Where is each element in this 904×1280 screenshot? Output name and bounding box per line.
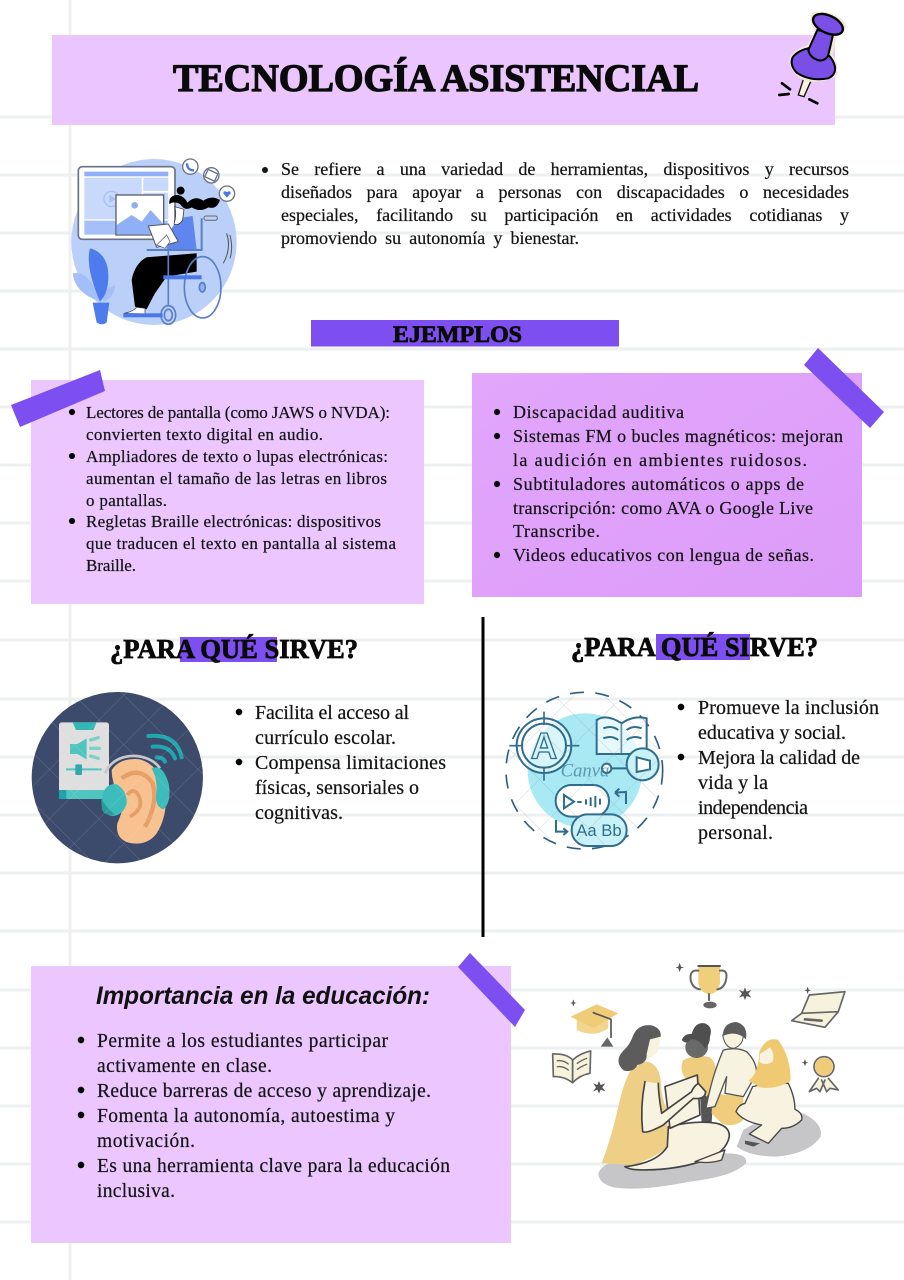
trophy <box>690 966 726 1008</box>
intro text with bullet: promoviendo su autonomía y bienestar. <box>281 228 579 248</box>
target letter A <box>509 712 579 781</box>
list: right uses: vida y la <box>698 772 768 794</box>
open book <box>553 1051 591 1083</box>
watermark: Canva <box>561 761 609 782</box>
open book <box>597 717 647 754</box>
tape <box>458 953 525 1027</box>
list: hearing tools: Sistemas FM o bucles magnéticos: mejoran <box>513 426 843 446</box>
list: benefits: Es una herramienta clave para la educación <box>97 1156 450 1177</box>
student in yellow <box>681 1023 716 1123</box>
list: right uses: Mejora la calidad de <box>698 747 860 769</box>
vertical divider <box>482 617 484 937</box>
speaker node <box>602 748 659 780</box>
panel: right examples <box>472 348 884 597</box>
title: TECNOLOGÍA ASISTENCIAL <box>173 56 699 100</box>
list: benefits: inclusiva. <box>97 1181 175 1202</box>
heading: para que sirve left: ¿PARA QUÉ SIRVE? <box>110 634 358 664</box>
list: right uses <box>678 697 879 844</box>
intro text with bullet: diseñados para apoyar a personas con discapacidades o necesidades <box>281 182 849 202</box>
plant in pot <box>73 248 115 324</box>
list: hearing tools: transcripción: como AVA o Google Live <box>513 498 813 518</box>
list: left uses <box>236 702 446 824</box>
heading: ejemplos <box>311 320 619 347</box>
list: screen tools: Regletas Braille electrónicas: dispositivos <box>86 512 381 531</box>
woman <box>124 187 220 314</box>
list: screen tools: convierten texto digital en audio. <box>86 425 323 444</box>
list: screen tools: o pantallas. <box>86 491 167 510</box>
heading: ejemplos: EJEMPLOS <box>393 322 522 347</box>
list: benefits: Fomenta la autonomía, autoestima y <box>97 1106 395 1127</box>
title banner <box>52 35 835 125</box>
list: left uses: Compensa limitaciones <box>255 752 446 774</box>
student with hijab <box>736 1039 802 1147</box>
wheelchair <box>123 216 232 324</box>
ground shadow <box>598 1113 821 1189</box>
list: screen tools: que traducen el texto en pantalla al sistema <box>86 534 396 553</box>
panel: left examples <box>11 370 424 604</box>
list: benefits <box>78 1031 450 1202</box>
list: left uses: cognitivas. <box>255 802 343 824</box>
list: right uses: personal. <box>698 822 773 844</box>
list: benefits: Permite a los estudiantes participar <box>97 1031 388 1052</box>
list: benefits: Reduce barreras de acceso y aprendizaje. <box>97 1081 431 1102</box>
illustration: person in wheelchair using a tablet <box>71 159 237 325</box>
panel: importance in education <box>31 953 525 1243</box>
text size pill <box>556 814 627 846</box>
list: benefits: activamente en clase. <box>97 1056 272 1077</box>
list: hearing tools: la audición en ambientes ruidosos. <box>513 450 807 470</box>
illustration: hearing aid and phone <box>32 692 203 863</box>
list: left uses: Facilita el acceso al <box>255 702 409 724</box>
list: right uses: independencia <box>698 797 808 819</box>
list: left uses: físicas, sensoriales o <box>255 777 419 799</box>
illustration: teacher and students with education icons <box>553 963 845 1189</box>
wireless waves <box>148 736 182 762</box>
list: benefits: motivación. <box>97 1131 195 1152</box>
laptop <box>792 992 845 1027</box>
list: hearing tools: Discapacidad auditiva <box>513 402 684 422</box>
teacher with tablet <box>602 1025 729 1170</box>
list: right uses: educativa y social. <box>698 722 846 744</box>
list: hearing tools: Transcribe. <box>513 521 600 541</box>
audio pill <box>556 785 626 817</box>
sparkles <box>570 963 811 1094</box>
illustration: accessible communication icons <box>506 692 663 849</box>
tape <box>804 348 884 428</box>
list: screen tools: Ampliadores de texto o lupas electrónicas: <box>86 447 388 466</box>
heading: para que sirve right: ¿PARA QUÉ SIRVE? <box>571 632 818 662</box>
list: hearing tools: Subtituladores automáticos o apps de <box>513 474 804 494</box>
list: hearing tools: Videos educativos con lengua de señas. <box>513 545 814 565</box>
screen with picture <box>78 167 175 239</box>
tape <box>11 370 105 427</box>
list: left uses: currículo escolar. <box>255 727 396 749</box>
list: right uses: Promueve la inclusión <box>698 697 879 719</box>
ear with hearing aid <box>101 756 170 844</box>
target letter A: A <box>531 726 557 767</box>
text size pill: Aa Bb <box>576 821 622 840</box>
list: screen tools <box>69 403 396 575</box>
contact icons <box>183 159 235 201</box>
medal <box>809 1057 838 1092</box>
intro text with bullet: especiales, facilitando su participación en actividades cotidianas y <box>281 205 849 225</box>
icon: push pin <box>779 10 846 103</box>
list: screen tools: Braille. <box>86 556 136 575</box>
graduation cap <box>571 1004 618 1047</box>
intro text with bullet: Se refiere a una variedad de herramientas, dispositivos y recursos <box>281 159 849 179</box>
intro text with bullet <box>262 159 850 248</box>
phone <box>59 722 109 799</box>
panel heading: Importancia en la educación: <box>96 982 430 1010</box>
list: screen tools: Lectores de pantalla (como JAWS o NVDA): <box>86 403 390 422</box>
list: hearing tools <box>494 402 843 565</box>
student boy <box>706 1022 757 1125</box>
list: screen tools: aumentan el tamaño de las letras en libros <box>86 469 387 488</box>
